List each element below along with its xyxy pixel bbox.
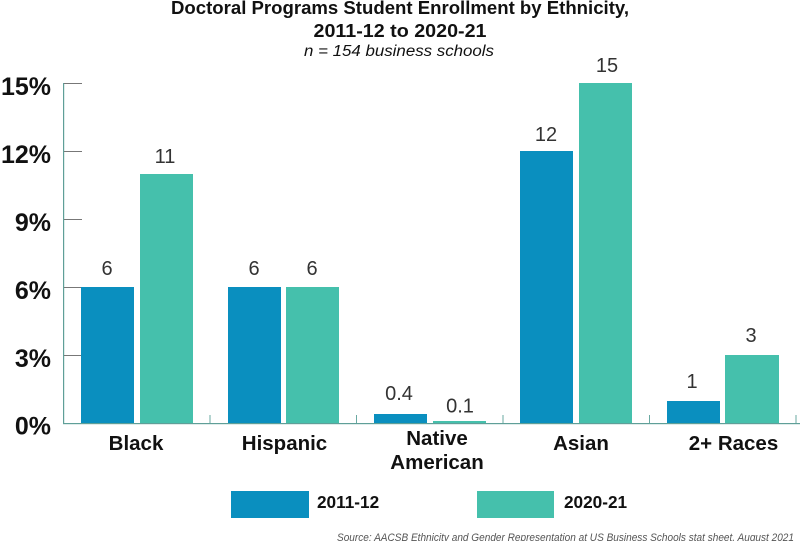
- y axis: 12%: [1, 141, 51, 169]
- group: Black: 11: [155, 146, 175, 168]
- y axis: 0%: [15, 412, 51, 440]
- legend: 2020-21: [564, 492, 628, 512]
- group: Asian: 12: [535, 124, 557, 146]
- group: Black: Black: [109, 432, 164, 455]
- group: 2+ Races: 1: [686, 371, 698, 393]
- legend: [231, 491, 628, 518]
- group: Asian: Asian: [553, 432, 609, 455]
- title: 2011-12 to 2020-21: [314, 21, 486, 41]
- y axis: 15%: [1, 73, 51, 101]
- group: Native American: Native: [406, 427, 468, 450]
- group: Asian: 15: [596, 55, 618, 77]
- subtitle: n = 154 business schools: [304, 43, 494, 60]
- group: 2+ Races: [667, 325, 779, 455]
- title: [171, 0, 629, 41]
- group: Hispanic: Hispanic: [242, 432, 327, 455]
- group: Native American: 0.1: [446, 396, 474, 418]
- group: 2+ Races: 2+ Races: [689, 432, 778, 455]
- group: Native American: American: [390, 451, 484, 474]
- y axis: 9%: [15, 209, 51, 237]
- group: Native American: 0.4: [385, 383, 413, 405]
- group: 2+ Races: 3: [745, 325, 757, 347]
- y axis: 6%: [15, 277, 51, 305]
- group: Hispanic: [228, 258, 339, 455]
- legend: 2011-12: [317, 492, 379, 512]
- group: Hispanic: 6: [306, 258, 318, 280]
- group: Black: [81, 146, 193, 455]
- group: Asian: [520, 55, 632, 455]
- group: Hispanic: 6: [248, 258, 260, 280]
- group: Native American: [374, 383, 486, 474]
- group: Black: 6: [101, 258, 113, 280]
- y axis: [1, 73, 800, 440]
- y axis: 3%: [15, 345, 51, 373]
